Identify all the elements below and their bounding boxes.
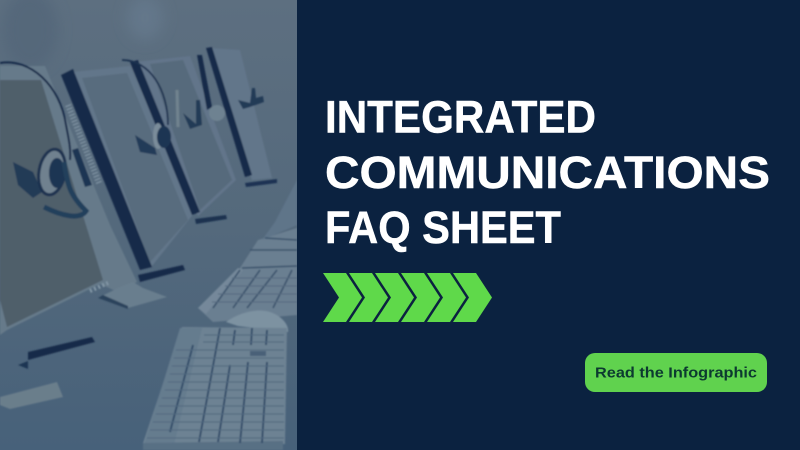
title [325,92,770,253]
monitor vents [68,105,108,291]
monitor one: casing and screen [0,66,137,335]
arrow: green chevrons [323,273,492,322]
mouse [226,310,288,332]
keyboard upper [198,180,297,322]
title: COMMUNICATIONS [325,147,770,198]
monitor four: back panel [210,48,272,180]
monitor edge strips [61,47,252,270]
monitor stands and feet [0,179,277,409]
headset two [122,60,225,155]
monitor three: back panel [135,56,236,216]
title: FAQ SHEET [325,202,561,253]
headset three [238,88,264,109]
keyboard lower [143,327,287,450]
button: read the infographic: Read the Infographic [595,366,757,382]
monitor two: back panel [73,66,195,266]
title: INTEGRATED [325,92,596,142]
button: read the infographic [585,353,767,392]
photo: call centre desks with monitors, headsets and keyboards [0,0,297,450]
headset one [0,62,86,216]
